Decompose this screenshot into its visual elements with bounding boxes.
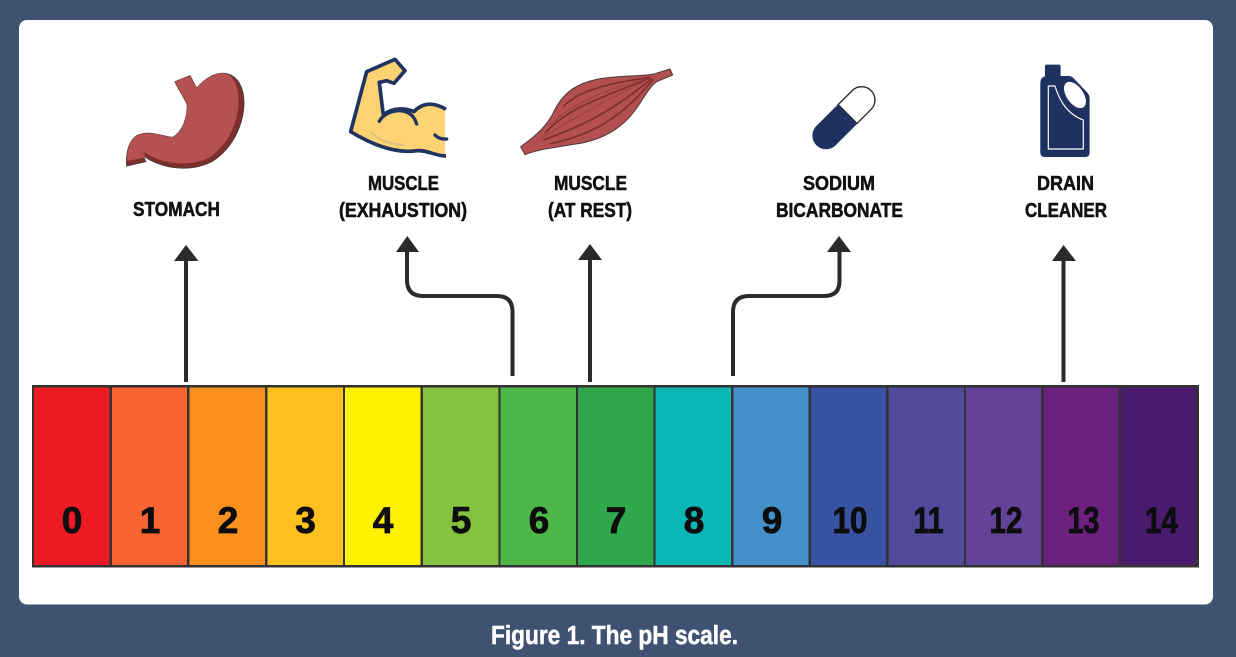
label: sodium bicarbonate (776, 173, 903, 222)
scale numbers (62, 500, 1178, 541)
label: drain cleaner (1025, 173, 1107, 222)
scale numbers: 1 (140, 500, 160, 541)
arrow: muscle exhaustion (396, 236, 512, 376)
label: drain cleaner: DRAIN (1037, 173, 1094, 195)
label: stomach: STOMACH (133, 199, 220, 221)
icon: drain cleaner bottle (1040, 65, 1090, 157)
icon: resting muscle (521, 69, 673, 155)
label: drain cleaner: CLEANER (1025, 200, 1107, 222)
arrow: drain cleaner (1052, 245, 1076, 382)
scale numbers: 12 (990, 500, 1022, 541)
scale numbers: 11 (914, 500, 944, 541)
chart: pH colour bar (32, 385, 1199, 568)
arrow: muscle at rest (578, 244, 602, 382)
arrow: stomach (174, 245, 198, 382)
label: muscle exhaustion (339, 173, 467, 222)
caption: Figure 1. The pH scale. (491, 622, 738, 650)
scale numbers: 4 (373, 500, 394, 541)
scale numbers: 14 (1145, 500, 1178, 541)
scale numbers: 13 (1068, 500, 1100, 541)
scale numbers: 0 (62, 500, 82, 541)
scale numbers: 3 (295, 500, 316, 541)
icon: flexed arm (351, 59, 447, 156)
scale numbers: 5 (451, 500, 471, 541)
label: muscle at rest: (AT REST) (548, 200, 632, 222)
arrow: sodium bicarbonate (733, 236, 851, 376)
scale numbers: 6 (529, 500, 549, 541)
icon: stomach (127, 73, 244, 168)
label: muscle at rest: MUSCLE (554, 173, 627, 195)
icon: capsule (807, 81, 881, 155)
scale numbers: 9 (762, 500, 782, 541)
scale numbers: 7 (606, 500, 626, 541)
scale numbers: 8 (684, 500, 704, 541)
scale numbers: 2 (218, 500, 238, 541)
label: muscle at rest (548, 173, 632, 222)
label: muscle exhaustion: MUSCLE (368, 173, 439, 195)
label: muscle exhaustion: (EXHAUSTION) (339, 200, 467, 222)
scale numbers: 10 (832, 500, 868, 541)
label: sodium bicarbonate: SODIUM (803, 173, 875, 195)
label: sodium bicarbonate: BICARBONATE (776, 200, 903, 222)
